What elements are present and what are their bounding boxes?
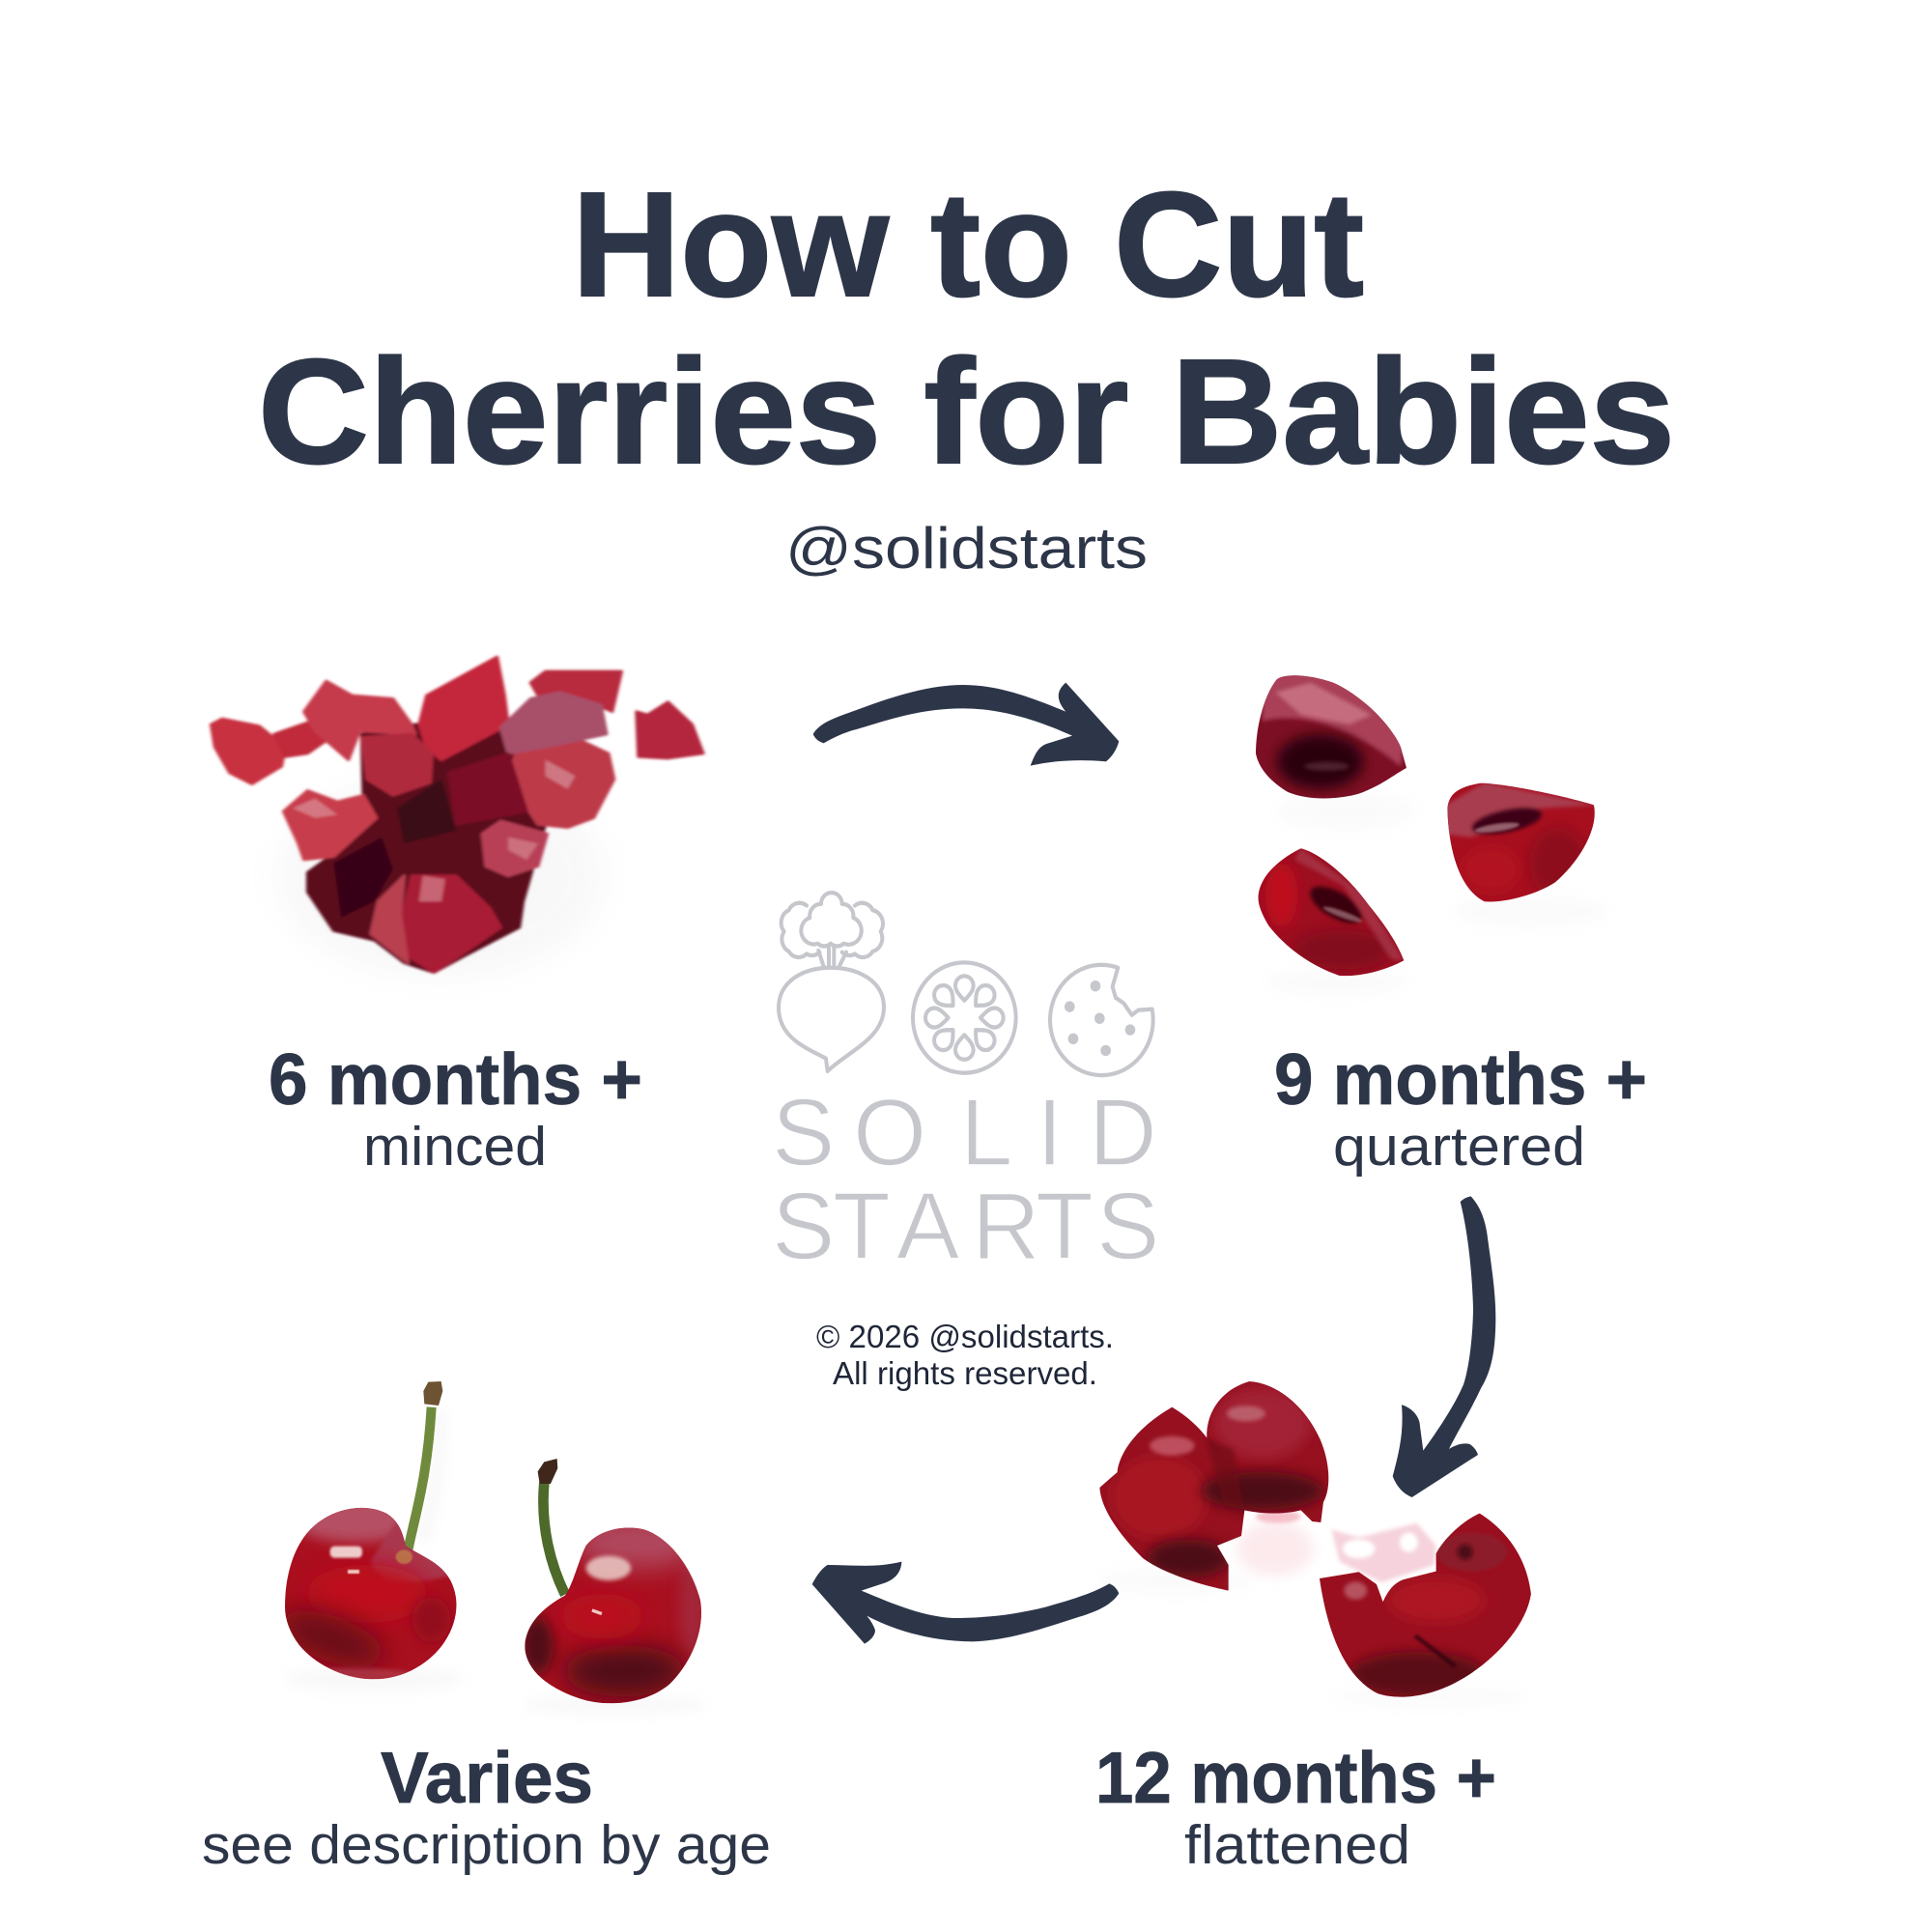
copyright [816,1319,1114,1391]
icon: turnip [779,893,884,1071]
label: 6 months +: 6 months + [269,1038,642,1120]
panel: minced cherries 6 months [211,657,703,1178]
photo: three cherry quarters [1256,675,1595,976]
wordmark: SOLID: SOLID [772,1079,1157,1185]
label: see description by age: see description by age [202,1814,771,1876]
copyright: All rights reserved. [833,1355,1097,1391]
label: flattened: flattened [1184,1814,1410,1876]
arrow: quartered to flattened [1393,1196,1495,1497]
copyright: © 2026 @solidstarts. [816,1319,1114,1354]
icon: bitten cookie [1050,965,1153,1075]
title [258,161,1675,495]
label: Varies: Varies [381,1737,593,1818]
label: quartered: quartered [1333,1116,1585,1178]
photo: two whole cherries [272,1381,708,1715]
icon: cucumber slice [913,962,1016,1073]
panel: flattened cherries 12 months [1094,1378,1536,1876]
title: Cherries for Babies [258,328,1675,495]
label: 12 months +: 12 months + [1095,1737,1496,1818]
photo: minced cherry pile [211,657,703,979]
icons: turnip, slice, cookie [779,893,1153,1075]
wordmark: STARTS: STARTS [772,1173,1159,1279]
label: 9 months +: 9 months + [1274,1038,1647,1120]
label: minced: minced [363,1116,547,1178]
panel: whole cherries [202,1381,771,1876]
stems [407,1407,432,1559]
panel: quartered cherries 9 months [1239,664,1647,1178]
logo: Solid Starts [772,893,1159,1279]
arrow: flattened to whole [812,1562,1119,1644]
arrow: minced to quartered [813,683,1119,766]
photo: flattened cherries [1094,1378,1536,1707]
handle: @solidstarts [785,516,1148,581]
title: How to Cut [572,161,1364,327]
